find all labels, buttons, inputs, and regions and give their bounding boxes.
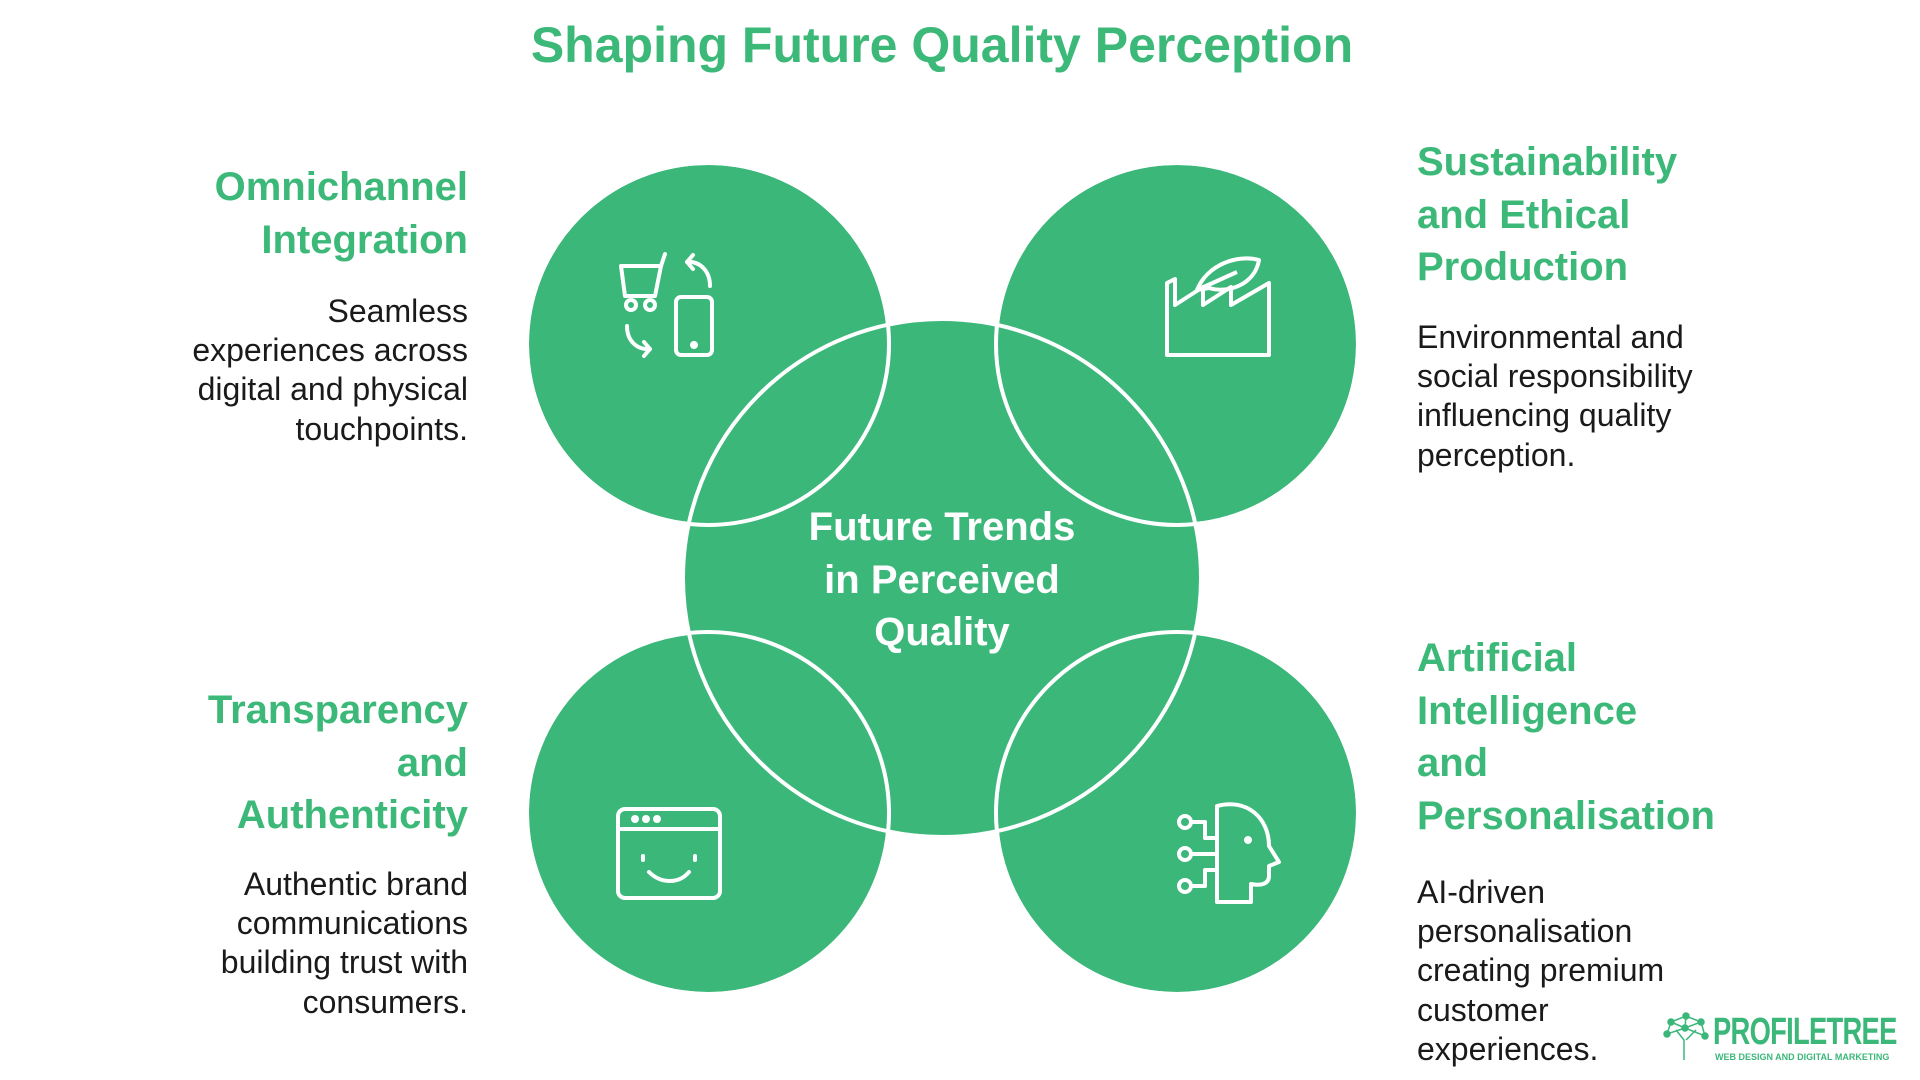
text: transparency: communications: [237, 905, 468, 941]
text: AI: AI-driven: [1417, 874, 1545, 910]
text: omnichannel: touchpoints.: [295, 411, 468, 447]
heading: transparency: Authenticity: [237, 793, 468, 837]
heading: AI: [1417, 636, 1715, 838]
heading: sustainability: and Ethical: [1417, 193, 1630, 237]
text: sustainability: influencing quality: [1417, 397, 1671, 433]
text: transparency: building trust with: [221, 944, 468, 980]
heading: AI: Personalisation: [1417, 794, 1715, 838]
text: AI: [1417, 874, 1664, 1067]
text: sustainability: [1417, 319, 1693, 473]
center label: Future Trends: [809, 505, 1075, 549]
text: transparency: consumers.: [303, 984, 468, 1020]
text: AI: personalisation: [1417, 913, 1632, 949]
text: sustainability: perception.: [1417, 437, 1575, 473]
center label: [809, 505, 1075, 654]
icon: AI head: [1179, 804, 1279, 902]
text: AI: experiences.: [1417, 1031, 1598, 1067]
icon: factory with leaf: [1167, 258, 1269, 355]
text: sustainability: Environmental and: [1417, 319, 1684, 355]
heading: AI: Intelligence: [1417, 689, 1637, 733]
heading: omnichannel: [215, 165, 468, 262]
logo: WEB DESIGN AND DIGITAL MARKETING: [1715, 1052, 1889, 1062]
logo: [1663, 1011, 1897, 1062]
center label: Quality: [874, 610, 1010, 654]
text: omnichannel: Seamless: [328, 293, 468, 329]
text: AI: creating premium: [1417, 952, 1664, 988]
icon: cart and phone: [621, 254, 712, 356]
heading: sustainability: Sustainability: [1417, 140, 1677, 184]
heading: transparency: and: [397, 741, 468, 785]
title: Shaping Future Quality Perception: [531, 17, 1353, 73]
text: omnichannel: digital and physical: [198, 371, 468, 407]
logo: PROFILETREE: [1713, 1011, 1897, 1053]
heading: AI: Artificial: [1417, 636, 1577, 680]
text: omnichannel: experiences across: [192, 332, 468, 368]
center label: in Perceived: [824, 558, 1060, 602]
heading: omnichannel: Omnichannel: [215, 165, 468, 209]
icon: browser smile: [618, 809, 720, 898]
heading: transparency: Transparency: [208, 688, 468, 732]
text: transparency: [221, 866, 468, 1020]
heading: sustainability: Production: [1417, 245, 1628, 289]
heading: AI: and: [1417, 741, 1488, 785]
text: transparency: Authentic brand: [244, 866, 468, 902]
text: sustainability: social responsibility: [1417, 358, 1693, 394]
text: AI: customer: [1417, 992, 1549, 1028]
heading: omnichannel: Integration: [261, 218, 468, 262]
heading: transparency: [208, 688, 468, 837]
heading: sustainability: [1417, 140, 1677, 289]
text: omnichannel: [192, 293, 468, 447]
